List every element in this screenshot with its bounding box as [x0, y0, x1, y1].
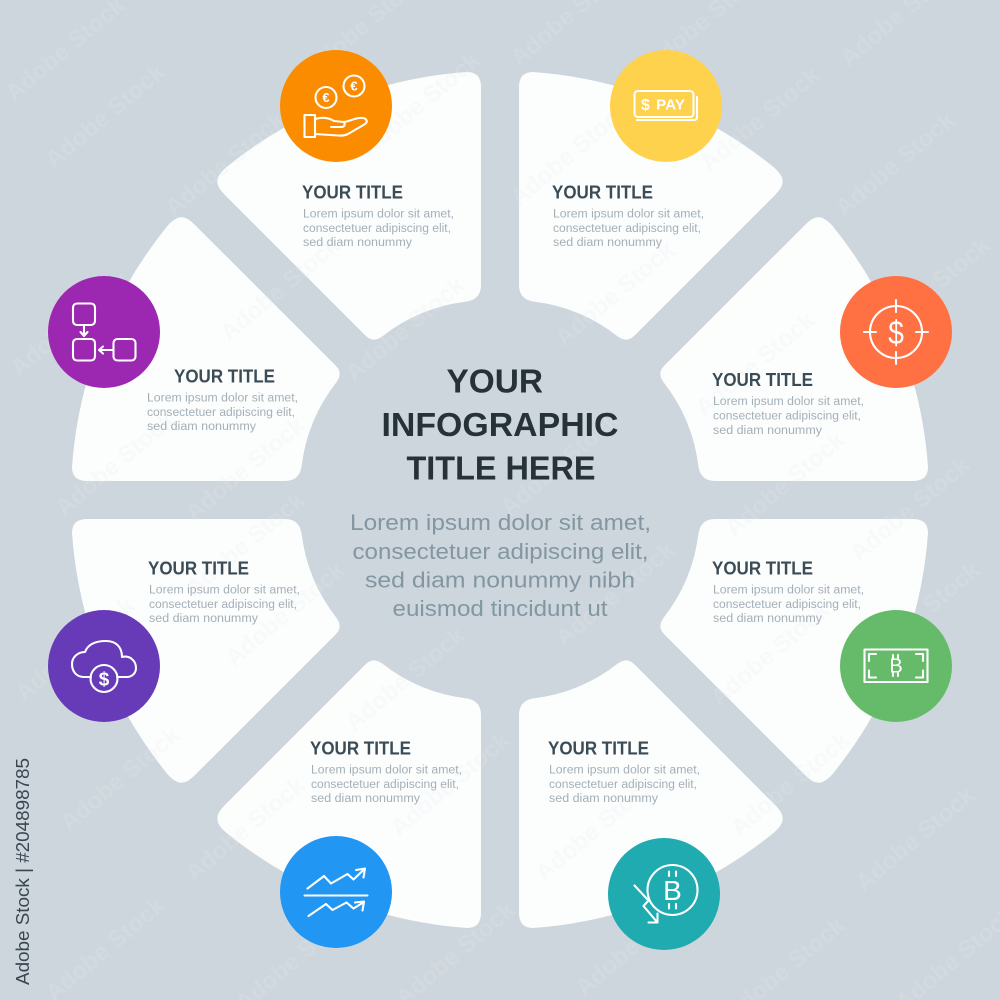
- vertical stock id label: Adobe Stock | #204898785: [13, 758, 33, 985]
- text: bottom right panel: Lorem ipsum dolor sit amet,: [549, 764, 700, 776]
- panel shape: left upper: [72, 217, 340, 481]
- watermark pattern: Adobe Stock: [215, 231, 346, 347]
- text: right lower panel: YOUR TITLE: [712, 558, 813, 578]
- center description: Lorem ipsum dolor sit amet,: [350, 510, 651, 535]
- text: right upper panel: [712, 370, 864, 437]
- text: right lower panel: [712, 558, 864, 625]
- watermark pattern: Adobe Stock: [40, 58, 171, 174]
- text: left lower panel: Lorem ipsum dolor sit amet,: [149, 584, 300, 596]
- text: right lower panel: sed diam nonummy: [713, 613, 822, 625]
- watermark pattern: Adobe Stock: [50, 406, 181, 522]
- icon: rising trend arrows: [280, 836, 392, 948]
- watermark pattern: Adobe Stock: [705, 596, 836, 712]
- icon: dollar target: $: [888, 315, 904, 352]
- center title: TITLE HERE: [406, 450, 596, 488]
- text: right upper panel: YOUR TITLE: [712, 370, 813, 390]
- text: top right panel: consectetuer adipiscing elit,: [553, 223, 701, 235]
- center title: INFOGRAPHIC: [382, 407, 618, 444]
- text: left lower panel: sed diam nonummy: [149, 613, 258, 625]
- watermark pattern: Adobe Stock: [385, 726, 516, 842]
- watermark pattern: Adobe Stock: [550, 536, 681, 652]
- watermark pattern: Adobe Stock: [830, 106, 961, 222]
- icon: hand receiving euro coins: [280, 50, 392, 162]
- panel shape: bottom left: [217, 660, 481, 928]
- watermark pattern: Adobe Stock: [505, 96, 636, 212]
- watermark pattern: Adobe Stock: [720, 426, 851, 542]
- watermark pattern: Adobe Stock: [845, 451, 976, 567]
- text: left lower panel: [148, 558, 300, 625]
- center title: [382, 364, 618, 488]
- icon: bitcoin banknote: B: [889, 656, 903, 678]
- panel shape: top left: [217, 72, 481, 340]
- text: bottom right panel: YOUR TITLE: [548, 738, 649, 758]
- watermark pattern: Adobe Stock: [695, 61, 826, 177]
- watermark pattern: Adobe Stock: [495, 406, 626, 522]
- text: bottom left panel: YOUR TITLE: [310, 738, 411, 758]
- text: top right panel: sed diam nonummy: [553, 237, 662, 249]
- text: bottom right panel: consectetuer adipiscing elit,: [549, 779, 697, 791]
- center description: [350, 510, 651, 621]
- text: left upper panel: Lorem ipsum dolor sit amet,: [147, 392, 298, 404]
- text: bottom left panel: sed diam nonummy: [311, 793, 420, 805]
- icon: bitcoin banknote: [840, 610, 952, 722]
- watermark pattern: Adobe Stock: [690, 306, 821, 422]
- text: right upper panel: Lorem ipsum dolor sit amet,: [713, 396, 864, 408]
- watermark pattern: Adobe Stock: [865, 231, 996, 347]
- icon: bitcoin falling arrow: [608, 838, 720, 950]
- text: left upper panel: sed diam nonummy: [147, 421, 256, 433]
- text: right upper panel: consectetuer adipiscing elit,: [713, 410, 861, 422]
- watermark pattern: Adobe Stock: [570, 886, 701, 1000]
- panel shapes ring: [72, 72, 928, 928]
- watermark pattern: Adobe Stock: [220, 556, 351, 672]
- text: top right panel: [552, 182, 704, 249]
- panel shape: right upper: [660, 217, 928, 481]
- watermark pattern: Adobe Stock: [180, 771, 311, 887]
- watermark pattern: Adobe Stock: [340, 271, 471, 387]
- text: right lower panel: consectetuer adipiscing elit,: [713, 599, 861, 611]
- text: top left panel: YOUR TITLE: [302, 182, 403, 202]
- text: left upper panel: [147, 366, 298, 433]
- text: left lower panel: YOUR TITLE: [148, 558, 249, 578]
- watermark pattern: Adobe Stock: [180, 411, 311, 527]
- text: bottom right panel: [548, 738, 700, 805]
- icon: hand receiving euro coins: €: [322, 90, 330, 105]
- center title: YOUR: [446, 364, 543, 400]
- watermark pattern: Adobe Stock: [160, 106, 291, 222]
- text: left upper panel: YOUR TITLE: [174, 366, 275, 386]
- panel shape: left lower: [72, 519, 340, 783]
- text: top left panel: [302, 182, 454, 249]
- text: top right panel: YOUR TITLE: [552, 182, 653, 202]
- text: bottom left panel: consectetuer adipiscing elit,: [311, 779, 459, 791]
- panel shape: top right: [519, 72, 783, 340]
- text: left upper panel: consectetuer adipiscing elit,: [147, 407, 295, 419]
- watermark pattern: Adobe Stock: [180, 486, 311, 602]
- panel shape: right lower: [660, 519, 928, 783]
- icon: pay banknote: [610, 50, 722, 162]
- icon: hand receiving euro coins: €: [350, 78, 358, 94]
- watermark pattern: Adobe Stock: [55, 721, 186, 837]
- text: bottom left panel: [310, 738, 462, 805]
- watermark pattern: Adobe Stock: [355, 46, 486, 162]
- text: top left panel: sed diam nonummy: [303, 237, 412, 249]
- text: top right panel: Lorem ipsum dolor sit amet,: [553, 208, 704, 220]
- watermark pattern: Adobe Stock: [5, 266, 136, 382]
- icon: cloud with dollar coin: $: [99, 670, 110, 690]
- text: left lower panel: consectetuer adipiscing elit,: [149, 599, 297, 611]
- text: bottom right panel: sed diam nonummy: [549, 793, 658, 805]
- icon: cloud with dollar coin: [48, 610, 160, 722]
- watermark pattern: Adobe Stock: [530, 771, 661, 887]
- panel shape: bottom right: [519, 660, 783, 928]
- watermark pattern: Adobe Stock: [850, 781, 981, 897]
- center description: sed diam nonummy nibh: [365, 568, 635, 592]
- center description: euismod tincidunt ut: [392, 596, 608, 621]
- watermark pattern: Adobe Stock: [550, 236, 681, 352]
- text: right lower panel: Lorem ipsum dolor sit amet,: [713, 584, 864, 596]
- watermark pattern: Adobe Stock: [10, 591, 141, 707]
- icon: process flow squares: [48, 276, 160, 388]
- icon: bitcoin falling arrow: B: [663, 875, 682, 906]
- icon: dollar target: [840, 276, 952, 388]
- watermark pattern: Adobe Stock: [855, 556, 986, 672]
- icon: pay banknote: $: [641, 97, 650, 114]
- watermark pattern: Adobe Stock: [340, 621, 471, 737]
- text: right upper panel: sed diam nonummy: [713, 425, 822, 437]
- watermark pattern: Adobe Stock: [725, 726, 856, 842]
- center description: consectetuer adipiscing elit,: [352, 539, 648, 564]
- text: top left panel: Lorem ipsum dolor sit amet,: [303, 208, 454, 220]
- icon: pay banknote: PAY: [656, 98, 685, 114]
- text: top left panel: consectetuer adipiscing elit,: [303, 223, 451, 235]
- text: bottom left panel: Lorem ipsum dolor sit amet,: [311, 764, 462, 776]
